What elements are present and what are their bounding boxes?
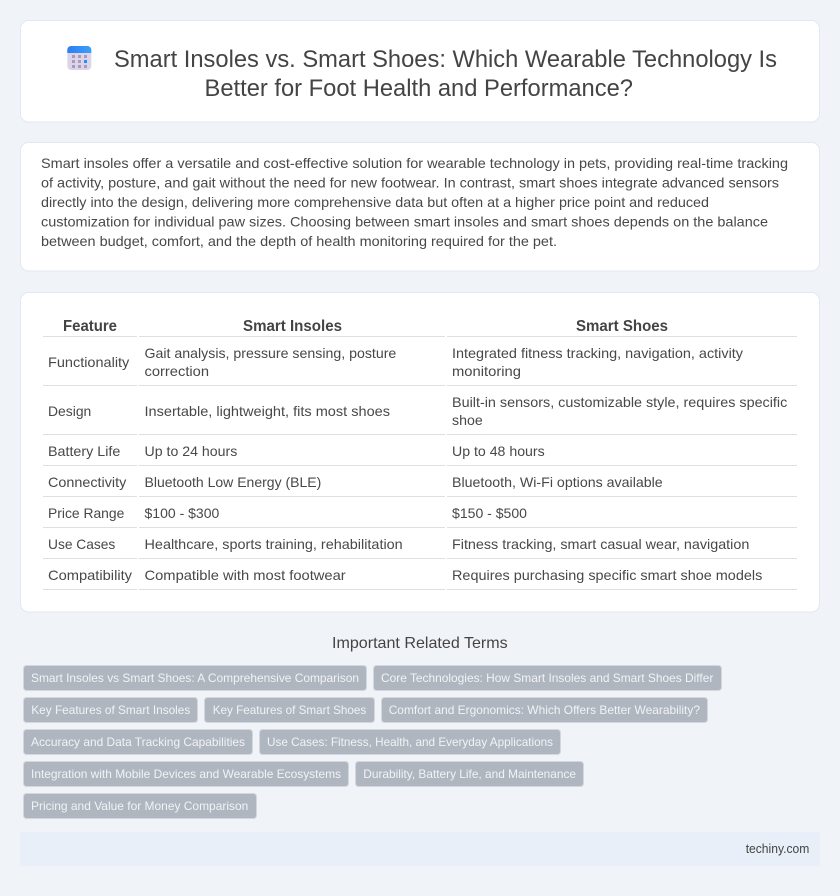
table row: design: shoe [452, 412, 483, 428]
table row: use cases [43, 536, 797, 559]
table row: connectivity: Bluetooth Low Energy (BLE) [144, 474, 321, 490]
heading: important related terms: Important Related Terms [332, 635, 508, 652]
panel: related term tags [24, 666, 722, 818]
table row: design [43, 394, 797, 435]
title: Smart Insoles vs. Smart Shoes: Which Wearable Technology Is [114, 46, 777, 73]
tag [260, 730, 560, 754]
text block: summary paragraph: directly into the design, delivering more comprehensive data but often at a higher price point and reduced [41, 194, 709, 210]
table header row: Feature [63, 318, 117, 335]
icon: calendar [67, 46, 91, 70]
table row: connectivity: Connectivity [48, 474, 126, 490]
panel: introduction text [20, 142, 820, 271]
table header row: Smart Insoles [243, 318, 342, 335]
table row: functionality: monitoring [452, 363, 521, 379]
tag: Use Cases: Fitness, Health, and Everyday Applications [267, 735, 553, 749]
tag [24, 794, 256, 818]
tag: Accuracy and Data Tracking Capabilities [31, 735, 245, 749]
tag [374, 666, 722, 690]
table row: functionality: Gait analysis, pressure sensing, posture [144, 345, 397, 361]
table row: design: Insertable, lightweight, fits most shoes [144, 403, 390, 419]
table row: use cases: Healthcare, sports training, rehabilitation [144, 536, 403, 552]
tag: Comfort and Ergonomics: Which Offers Better Wearability? [389, 703, 700, 717]
table row: design: Design [48, 403, 91, 419]
tag: Integration with Mobile Devices and Wearable Ecosystems [31, 767, 341, 781]
table row: functionality: Functionality [48, 354, 129, 370]
text block: summary paragraph [41, 155, 788, 249]
table header row [43, 318, 797, 337]
table row: connectivity: Bluetooth, Wi-Fi options available [452, 474, 663, 490]
table row: compatibility: Compatible with most footwear [144, 567, 346, 583]
table row: compatibility: Compatibility [48, 567, 132, 583]
tag: Core Technologies: How Smart Insoles and Smart Shoes Differ [381, 671, 713, 685]
tag [356, 762, 584, 786]
panel: title header [20, 20, 820, 122]
table row: connectivity [43, 474, 797, 497]
table header row: Smart Shoes [576, 318, 668, 335]
table row: price range [43, 505, 797, 528]
table row: functionality: correction [144, 363, 209, 379]
table row: functionality [43, 345, 797, 386]
text block: summary paragraph: Smart insoles offer a versatile and cost-effective solution for wearable technology in pets, providing real-time tracking [41, 155, 788, 171]
tag [24, 730, 252, 754]
tag [24, 762, 348, 786]
title: Better for Foot Health and Performance? [204, 75, 633, 102]
tag: Smart Insoles vs Smart Shoes: A Comprehensive Comparison [31, 671, 359, 685]
text block: summary paragraph: customization for individual paw sizes. Choosing between smart insoles and smart shoes depends on the balance [41, 213, 768, 229]
tag: Key Features of Smart Shoes [213, 703, 366, 717]
tag [382, 698, 708, 722]
tag [204, 698, 374, 722]
table row: design: Built-in sensors, customizable style, requires specific [452, 394, 787, 410]
table row: functionality: Integrated fitness tracking, navigation, activity [452, 345, 743, 361]
tag [24, 666, 366, 690]
table row: battery life [43, 443, 797, 466]
table row: battery life: Up to 48 hours [452, 443, 545, 459]
table row: battery life: Battery Life [48, 443, 121, 459]
table row: use cases: Use Cases [48, 536, 115, 552]
tag [24, 698, 198, 722]
table row: use cases: Fitness tracking, smart casual wear, navigation [452, 536, 749, 552]
text block: summary paragraph: of activity, posture, and gait without the need for new footwear. In contrast, smart shoes integrate advanced sensors [41, 174, 779, 190]
panel: comparison table [20, 292, 820, 612]
text block: summary paragraph: between budget, comfort, and the depth of health monitoring required for the pet. [41, 233, 557, 249]
table row: price range: $100 - $300 [144, 505, 220, 521]
table row: price range: Price Range [48, 505, 125, 521]
table row: compatibility [43, 567, 797, 590]
table row: price range: $150 - $500 [452, 505, 527, 521]
footer: techiny.com [746, 841, 809, 856]
tag: Durability, Battery Life, and Maintenance [363, 767, 576, 781]
tag: Key Features of Smart Insoles [31, 703, 190, 717]
table row: compatibility: Requires purchasing specific smart shoe models [452, 567, 762, 583]
tag: Pricing and Value for Money Comparison [31, 799, 248, 813]
footer [20, 832, 820, 866]
title [114, 46, 777, 102]
table row: battery life: Up to 24 hours [144, 443, 237, 459]
